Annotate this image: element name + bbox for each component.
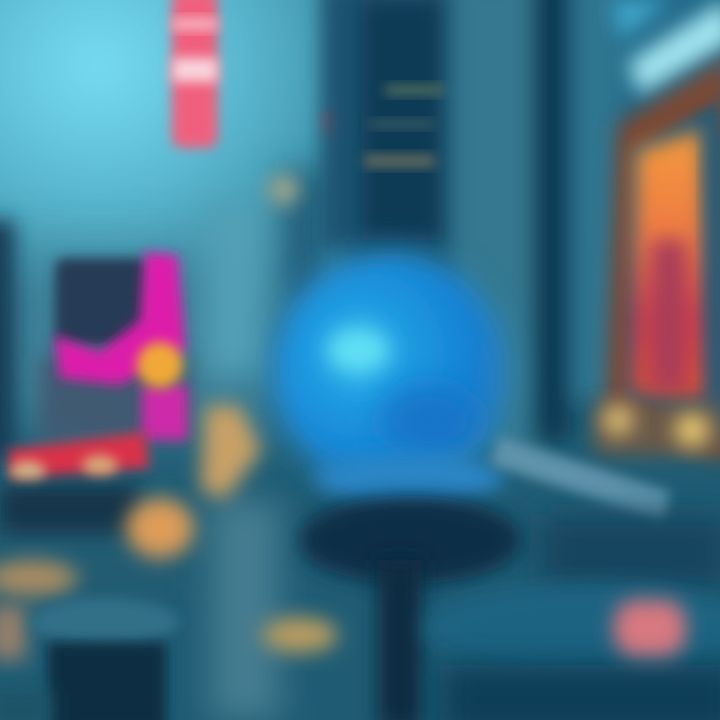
left magenta sign [40,252,190,440]
central dark building [322,0,462,250]
hanging pink banner [172,0,352,205]
magnifier handle bar [490,436,670,522]
blue glowing globe [268,250,512,502]
right building columns [452,0,720,450]
left pedestal [0,598,179,720]
pink object on table [614,600,686,656]
left red awning [0,432,150,540]
warm street lights [0,405,338,660]
distant tower [205,170,330,375]
right billboard [595,55,720,460]
globe stand [298,496,522,720]
right table [425,515,720,720]
lower street haze [0,500,280,720]
right top cyan sign [612,0,720,95]
